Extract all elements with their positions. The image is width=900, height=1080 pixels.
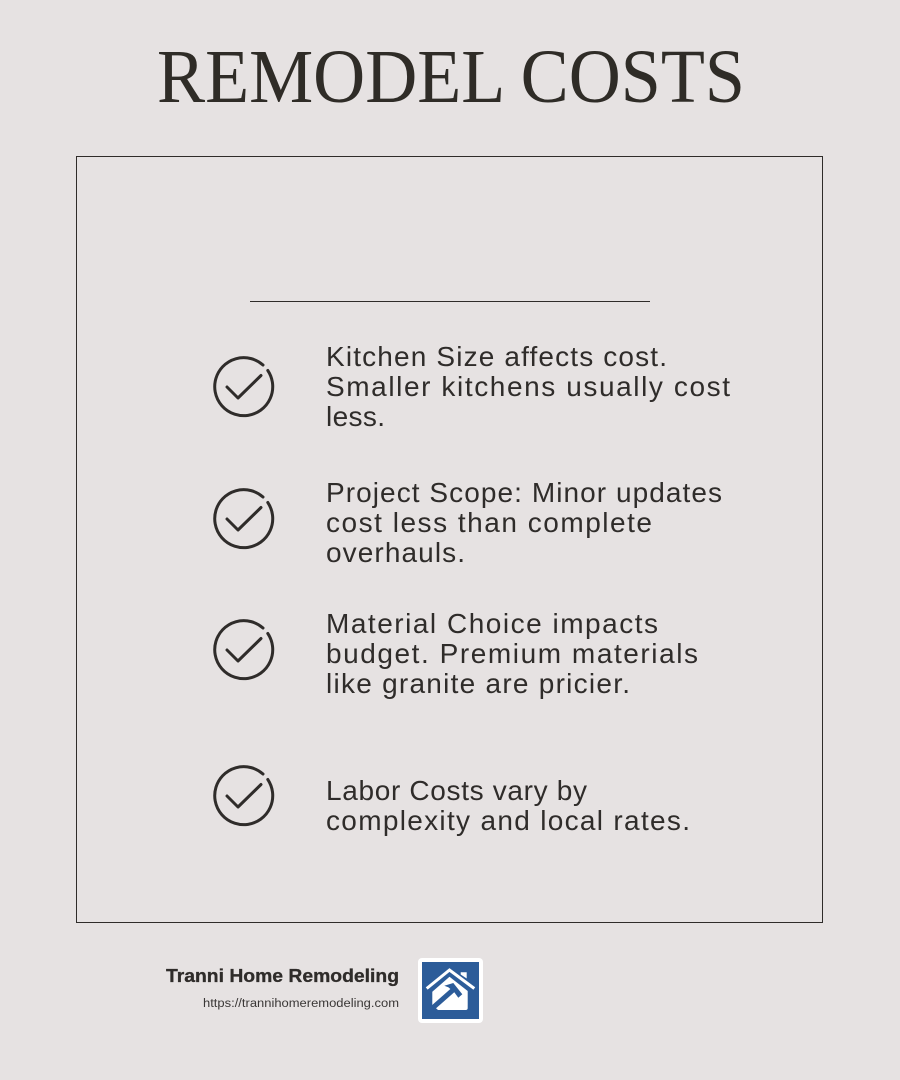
- icon: check circle: [215, 767, 273, 825]
- text: kitchen size: Kitchen Size affects cost.: [326, 341, 667, 372]
- icon: check circle: [215, 358, 273, 416]
- text: material choice: Material Choice impacts: [326, 608, 658, 639]
- item: kitchen size: [215, 341, 730, 432]
- text: project scope: overhauls.: [326, 537, 465, 568]
- item: labor costs: [215, 767, 690, 836]
- panel: cost factors: [76, 156, 822, 922]
- item: project scope: [215, 477, 722, 568]
- footer url: https://trannihomeremodeling.com: [203, 998, 399, 1010]
- icon: company logo: [418, 958, 483, 1023]
- text: material choice: budget. Premium materials: [326, 638, 698, 669]
- text: labor costs: Labor Costs vary by: [326, 775, 587, 806]
- item: material choice: [215, 608, 698, 699]
- footer brand name: Tranni Home Remodeling: [166, 966, 399, 986]
- text: material choice: like granite are pricier.: [326, 668, 630, 699]
- text: project scope: Project Scope: Minor updates: [326, 477, 722, 508]
- icon: check circle: [215, 490, 273, 548]
- text: project scope: cost less than complete: [326, 507, 652, 538]
- text: labor costs: complexity and local rates.: [326, 805, 690, 836]
- icon: check circle: [215, 621, 273, 679]
- divider line: [250, 300, 650, 302]
- title: REMODEL COSTS: [157, 35, 745, 119]
- text: kitchen size: less.: [326, 401, 385, 432]
- text: kitchen size: Smaller kitchens usually cost: [326, 371, 730, 402]
